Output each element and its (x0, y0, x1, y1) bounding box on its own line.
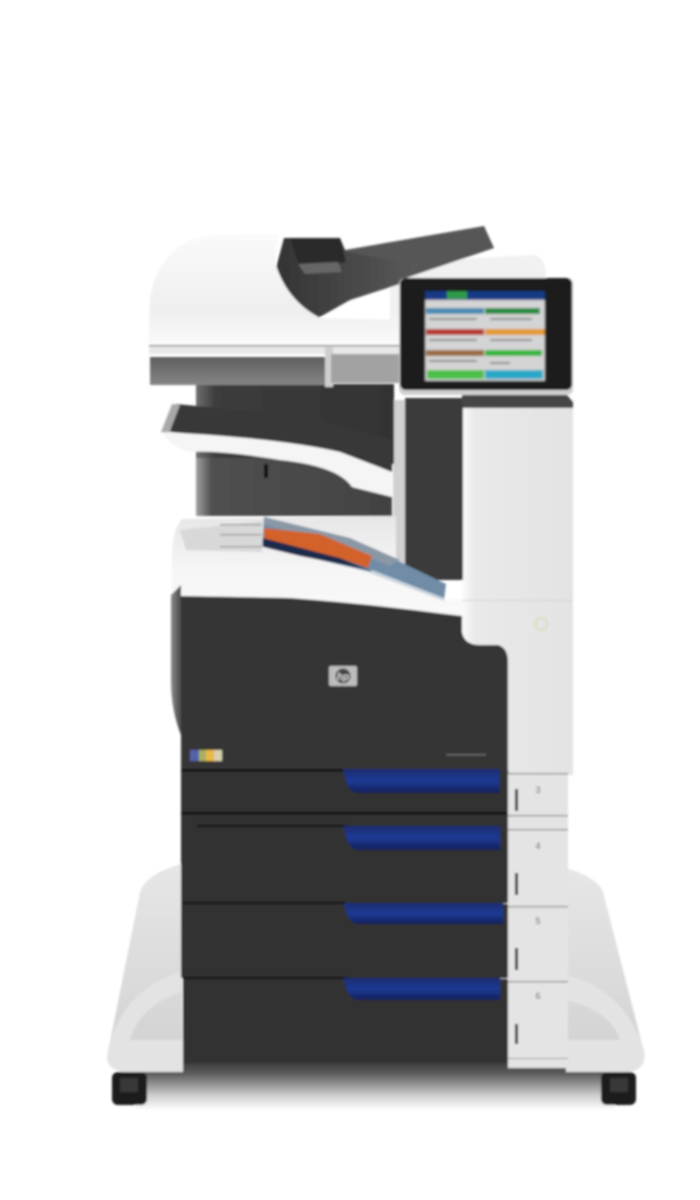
tray label column: 5 (535, 916, 541, 926)
tray label column: 6 (535, 991, 541, 1001)
body left edge (171, 585, 181, 735)
blue handle: tray 5 (343, 978, 500, 1000)
scanner front band (149, 345, 399, 387)
silver strip (393, 400, 405, 565)
paper tray 2 (181, 771, 509, 813)
tray label column (508, 772, 568, 1068)
middle interior (196, 384, 394, 464)
paper tray 3 (181, 814, 509, 903)
blue handle: tray 2 (343, 769, 500, 793)
document feeder tray (276, 226, 494, 318)
main dark body (181, 596, 508, 772)
tray label column: 4 (535, 841, 541, 851)
base: left leg (107, 864, 183, 1072)
control panel (399, 278, 573, 395)
base: right leg (566, 868, 644, 1072)
HP logo (329, 666, 357, 686)
printed paper on tray (262, 517, 446, 601)
paper tray 4 (181, 904, 509, 978)
tray separators (181, 769, 509, 979)
touch screen (425, 291, 545, 381)
caster: right (601, 1072, 636, 1105)
scanner lid (148, 234, 400, 346)
lower output tray (172, 516, 462, 625)
blue handle: tray 4 (343, 903, 503, 924)
upper output tray (161, 404, 392, 497)
blue handle: tray 3 (343, 826, 500, 850)
tray label column: 3 (535, 785, 541, 795)
caster: left (112, 1072, 147, 1105)
floor shadow (135, 1054, 615, 1110)
paper tray 5 (183, 979, 508, 1063)
column dark top band (462, 394, 573, 408)
HP logo: hp (337, 672, 349, 683)
model name (446, 754, 486, 756)
right white column (462, 400, 573, 775)
interior lower section (196, 458, 392, 516)
dark column (405, 398, 463, 580)
column separator line (462, 600, 573, 601)
colour strip logo (190, 750, 222, 761)
base: leg highlights (107, 972, 644, 1072)
power button (535, 618, 547, 630)
interior slot (264, 464, 268, 478)
scanner back panel (390, 255, 546, 320)
